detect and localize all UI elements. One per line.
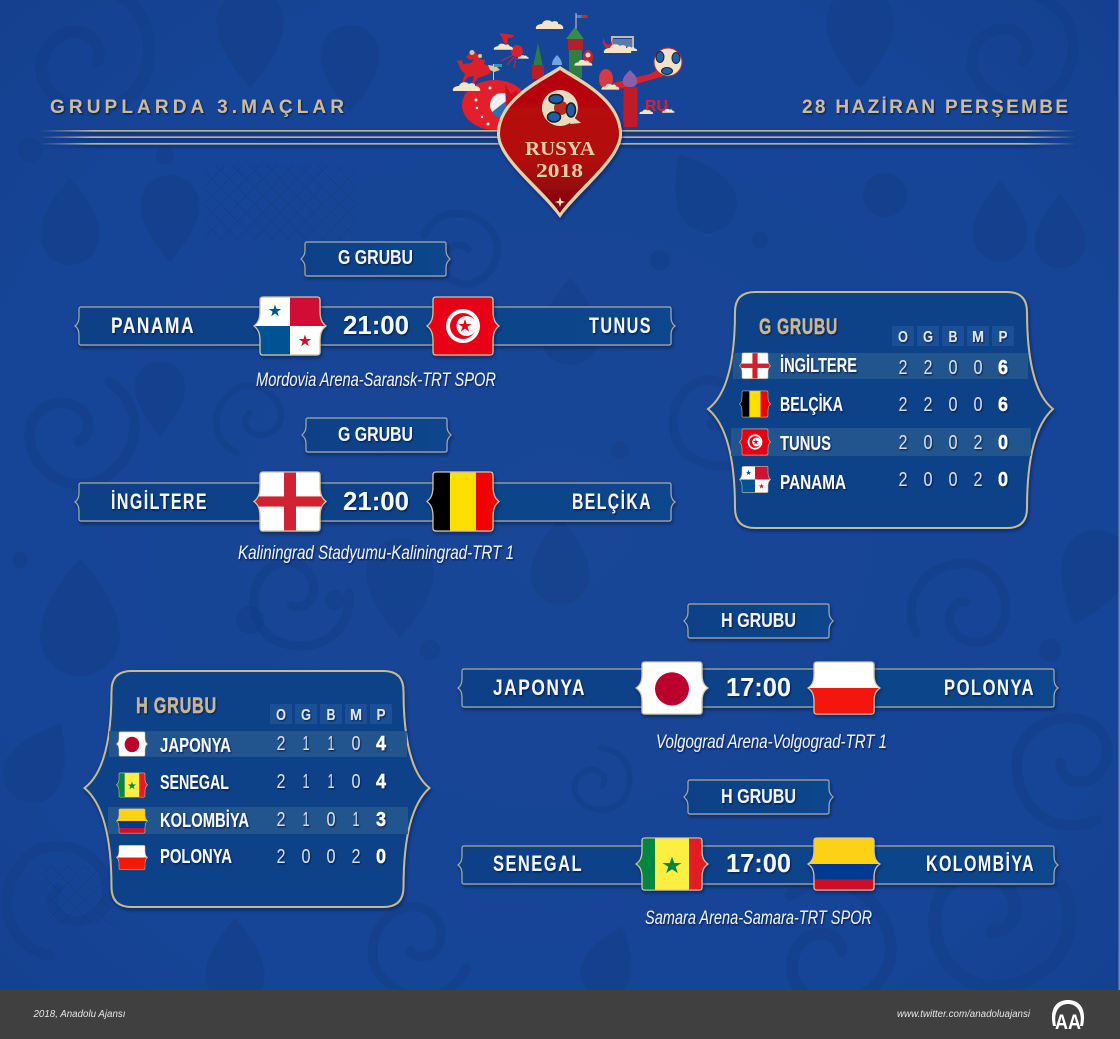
flag: Senegal <box>635 837 709 891</box>
row: Polonya: 2 <box>352 846 360 868</box>
illustration: Faberge egg <box>599 69 613 89</box>
row: Tunus <box>739 428 1008 456</box>
row: Polonya: 0 <box>302 846 310 868</box>
row: Tunus: 0 <box>998 432 1008 454</box>
row: Polonya: 2 <box>276 846 286 868</box>
row: Tunus: 2 <box>898 432 908 454</box>
row: Japonya: 1 <box>302 733 310 755</box>
footer bar <box>0 990 1120 1039</box>
row: Tunus: 0 <box>924 432 932 454</box>
column headers: M <box>350 707 362 724</box>
illustration: red plane <box>499 33 514 45</box>
row: Belçika: 0 <box>974 394 982 416</box>
flag: Panama <box>253 296 327 356</box>
column headers: O <box>276 707 286 724</box>
flag: Kolombiya <box>807 837 881 891</box>
illustration: satellite <box>501 46 522 68</box>
row: Panama: 0 <box>998 469 1008 491</box>
badge year: 2018 <box>536 160 583 182</box>
row: İngiltere: 2 <box>898 357 908 379</box>
column headers <box>270 704 392 724</box>
illustration: trumpet and flag <box>488 64 502 80</box>
row: Kolombiya <box>116 808 386 834</box>
icon: sparkle <box>555 197 565 207</box>
row: Senegal: 0 <box>352 771 360 793</box>
team: Tunus: TUNUS <box>589 313 652 338</box>
column headers: M <box>972 329 984 346</box>
row: İngiltere: 0 <box>948 357 958 379</box>
row: Panama: 0 <box>924 469 932 491</box>
column headers: P <box>998 329 1008 346</box>
column headers: B <box>326 707 336 724</box>
row: Senegal: 4 <box>376 771 387 793</box>
team: Senegal: SENEGAL <box>493 851 583 876</box>
row: İngiltere: 2 <box>924 357 932 379</box>
match: Japonya vs Polonya <box>458 661 1058 715</box>
flag: Japonya <box>635 661 709 715</box>
row: Panama: 2 <box>898 469 908 491</box>
match: Senegal vs Kolombiya <box>458 837 1058 891</box>
kickoff time: 21:00 <box>343 486 409 516</box>
row: İngiltere: 6 <box>998 357 1008 379</box>
row: Japonya: JAPONYA <box>160 734 231 757</box>
row: Panama: PANAMA <box>780 471 846 494</box>
column headers: P <box>376 707 386 724</box>
illustration: red stadium <box>462 80 528 130</box>
row: İngiltere <box>739 352 1008 379</box>
icon: AA logo <box>1052 1000 1084 1034</box>
credit: 2018, Anadolu Ajansı <box>33 1009 126 1020</box>
column headers: B <box>948 329 958 346</box>
table title: H GRUBU <box>136 693 217 718</box>
venue: Kaliningrad Stadyumu-Kaliningrad-TRT 1 <box>238 543 514 564</box>
row: Belçika: 2 <box>898 394 908 416</box>
badge: Rusya 2018 <box>497 66 622 218</box>
team: İngiltere: İNGİLTERE <box>111 489 208 514</box>
row: Tunus: 2 <box>974 432 982 454</box>
row: Panama: 0 <box>948 469 958 491</box>
row: Polonya: POLONYA <box>160 845 232 868</box>
team: Kolombiya: KOLOMBİYA <box>926 851 1035 876</box>
row: Tunus: 0 <box>948 432 958 454</box>
row: Kolombiya: 1 <box>352 809 360 831</box>
standings table: H GRUBU <box>84 671 430 907</box>
illustration: Kremlin tower <box>566 13 588 78</box>
kickoff time: 17:00 <box>726 848 791 878</box>
team: Panama: PANAMA <box>111 313 195 338</box>
table title: G GRUBU <box>759 314 838 339</box>
row: Senegal: 1 <box>328 771 334 793</box>
row: Polonya: 0 <box>326 846 336 868</box>
illustration: RU mark <box>639 98 674 115</box>
row: Polonya: 0 <box>376 846 386 868</box>
row: Kolombiya: KOLOMBİYA <box>160 809 249 832</box>
illustration: goal and player <box>603 37 637 53</box>
row: Japonya: 0 <box>352 733 360 755</box>
group label: G GRUBU 2 <box>302 418 451 452</box>
row: Japonya: 2 <box>276 733 286 755</box>
badge text: RUSYA <box>525 138 596 160</box>
twitter url: www.twitter.com/anadoluajansi <box>897 1009 1031 1020</box>
row: Senegal: 2 <box>276 771 286 793</box>
match: Panama vs Tunus <box>75 296 675 356</box>
row: Kolombiya: 0 <box>326 809 336 831</box>
team: Japonya: JAPONYA <box>493 675 586 700</box>
match: İngiltere vs Belçika <box>75 471 675 532</box>
illustration: red tower with purple dome <box>623 70 638 127</box>
kickoff time: 17:00 <box>726 672 791 702</box>
group label: H GRUBU 2 <box>684 780 833 814</box>
row: Senegal: 1 <box>302 771 310 793</box>
row: Belçika <box>739 390 1008 418</box>
row: Kolombiya: 2 <box>276 809 286 831</box>
kickoff time: 21:00 <box>343 310 409 340</box>
illustration: blue onion dome <box>552 55 562 65</box>
group label: G GRUBU 2: G GRUBU <box>338 424 413 446</box>
venue: Samara Arena-Samara-TRT SPOR <box>645 908 872 929</box>
team: Polonya: POLONYA <box>944 675 1035 700</box>
flag: Tunus <box>426 296 500 356</box>
row: İngiltere: İNGİLTERE <box>780 354 857 377</box>
illustration: Russia landmarks <box>453 13 682 130</box>
illustration: red horses <box>457 50 491 85</box>
illustration: matryoshka <box>583 50 593 64</box>
heading: date: 28 HAZİRAN PERŞEMBE <box>802 97 1068 118</box>
icon: AA logo: AA <box>1055 1011 1081 1034</box>
row: Belçika: 6 <box>998 394 1008 416</box>
row: Tunus: TUNUS <box>780 432 831 455</box>
flag: Polonya <box>807 661 881 715</box>
icon: tournament logo <box>542 90 581 126</box>
row: Japonya <box>116 732 387 757</box>
row: Kolombiya: 1 <box>302 809 310 831</box>
row: Kolombiya: 3 <box>376 809 386 831</box>
group label: H GRUBU 1: H GRUBU <box>721 610 796 632</box>
illustration: green tower with red base <box>532 43 544 79</box>
flag: İngiltere <box>253 471 327 532</box>
column headers: G <box>301 707 311 724</box>
group label: H GRUBU 2: H GRUBU <box>721 786 796 808</box>
group label: G GRUBU 1: G GRUBU <box>338 247 413 269</box>
column headers: O <box>898 329 908 346</box>
group label: G GRUBU 1 <box>301 242 450 276</box>
row: Panama <box>739 466 1008 494</box>
illustration: ball with red arm <box>613 48 682 90</box>
row: Senegal: SENEGAL <box>160 771 229 794</box>
row: Belçika: 0 <box>948 394 958 416</box>
row: İngiltere: 0 <box>974 357 982 379</box>
row: Panama: 2 <box>974 469 982 491</box>
venue: Volgograd Arena-Volgograd-TRT 1 <box>656 732 887 753</box>
row: Japonya: 1 <box>328 733 334 755</box>
row: Polonya <box>116 845 386 870</box>
row: Senegal <box>116 771 387 798</box>
row: Belçika: BELÇİKA <box>780 393 843 416</box>
column headers <box>892 326 1014 346</box>
row: Belçika: 2 <box>924 394 932 416</box>
venue: Mordovia Arena-Saransk-TRT SPOR <box>256 370 496 391</box>
illustration: RU mark: RU <box>645 98 668 115</box>
heading: group matches: GRUPLARDA 3.MAÇLAR <box>50 97 344 118</box>
team: Belçika: BELÇİKA <box>572 489 652 514</box>
group label: H GRUBU 1 <box>684 604 833 638</box>
standings table: G GRUBU <box>708 292 1053 528</box>
flag: Belçika <box>426 471 500 532</box>
column headers: G <box>923 329 933 346</box>
row: Japonya: 4 <box>376 733 387 755</box>
